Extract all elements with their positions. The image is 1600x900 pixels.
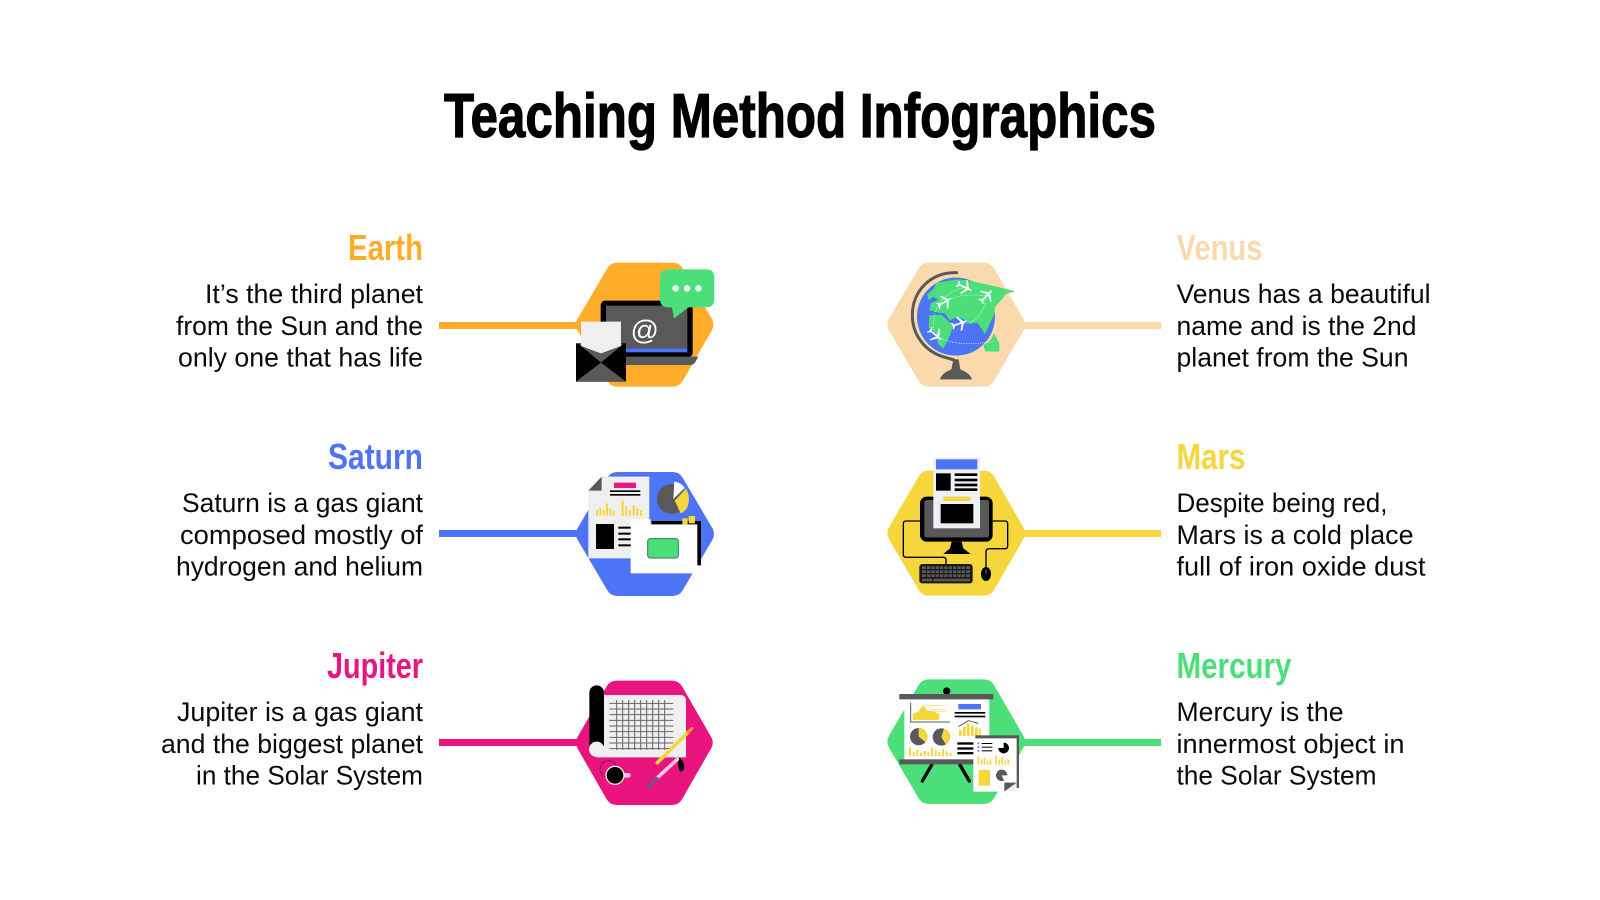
text block: Earth description: from the Sun and the [176, 311, 423, 341]
connector: Jupiter [439, 739, 579, 746]
text block: Saturn description: hydrogen and helium [176, 552, 423, 582]
panel: Earth [176, 227, 714, 382]
icon: presentation board with charts on green hexagon [899, 687, 1019, 792]
icon: globe with planes on peach hexagon [899, 273, 1015, 379]
heading: Earth: Earth [348, 227, 423, 268]
heading: Mars: Mars [1176, 436, 1246, 477]
heading: Mercury: Mercury [1176, 645, 1292, 686]
planes [924, 277, 997, 345]
connector: Saturn [439, 530, 579, 537]
continents [927, 279, 1015, 352]
icon: documents and folder on blue hexagon [588, 477, 702, 584]
text block: Mars description [1176, 488, 1426, 582]
text block: Jupiter description: in the Solar System [196, 760, 423, 790]
text block: Saturn description [176, 488, 424, 582]
connector: Mercury [1022, 739, 1161, 746]
text block: Venus description: name and is the 2nd [1176, 311, 1416, 341]
text block: Venus description: Venus has a beautiful [1176, 279, 1430, 309]
text block: Earth description: It’s the third planet [205, 279, 424, 309]
text block: Mercury description: the Solar System [1176, 760, 1376, 790]
text block: Jupiter description: and the biggest planet [161, 729, 424, 759]
flight routes [933, 287, 993, 344]
text block: Mars description: Despite being red, [1176, 488, 1388, 518]
connector: Earth [439, 322, 579, 329]
panel: Mercury [899, 645, 1404, 792]
heading: Venus: Venus [1176, 227, 1262, 268]
icon: desktop computer with document on yellow hexagon [899, 457, 1013, 584]
text block: Mercury description [1176, 697, 1404, 790]
title: Teaching Method Infographics [444, 82, 1156, 151]
connector: Mars [1022, 530, 1161, 537]
connector: Venus [1022, 322, 1161, 329]
icon: laptop with mail and chat on orange hexagon: @ [630, 314, 659, 345]
text block: Earth description: only one that has life [178, 342, 423, 372]
text block: Venus description [1176, 279, 1430, 372]
text block: Venus description: planet from the Sun [1176, 342, 1408, 372]
text block: Mars description: Mars is a cold place [1176, 520, 1414, 550]
text block: Saturn description: composed mostly of [180, 520, 424, 550]
text block: Jupiter description: Jupiter is a gas giant [177, 697, 424, 727]
icon: laptop with mail and chat on orange hexagon [576, 269, 714, 382]
heading: Saturn: Saturn [328, 436, 423, 477]
panel: Jupiter [161, 645, 701, 793]
panel: Venus [899, 227, 1430, 379]
text block: Mars description: full of iron oxide dust [1176, 552, 1426, 582]
text block: Mercury description: Mercury is the [1176, 697, 1344, 727]
panel: Mars [899, 436, 1426, 584]
text block: Jupiter description [161, 697, 424, 790]
text block: Mercury description: innermost object in [1176, 729, 1404, 759]
text block: Saturn description: Saturn is a gas giant [182, 488, 424, 518]
icon: blueprint, pencil and coffee on pink hexagon [588, 685, 701, 793]
panel: Saturn [176, 436, 702, 584]
heading: Jupiter: Jupiter [327, 645, 423, 686]
text block: Earth description [176, 279, 424, 372]
